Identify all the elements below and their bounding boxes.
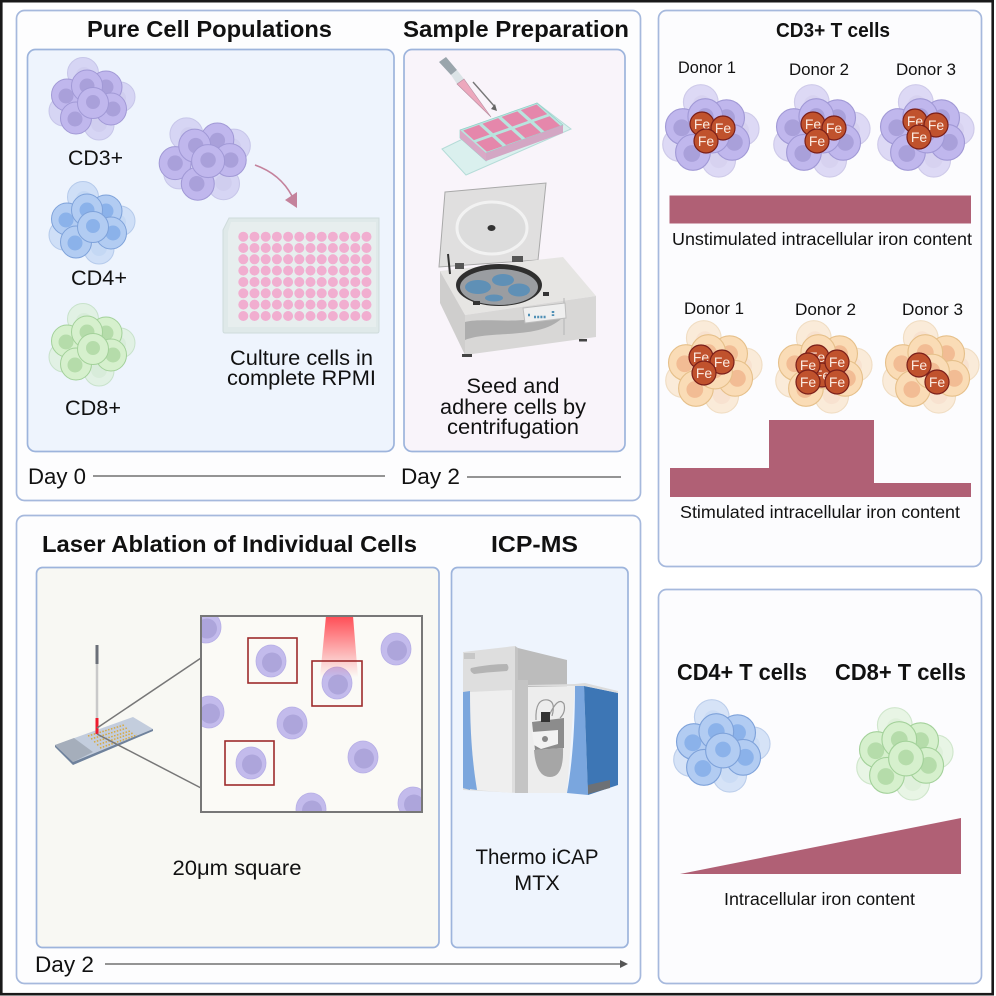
text: seed and adhere: adhere cells by xyxy=(440,395,586,419)
icon: 96-well plate xyxy=(223,218,379,333)
stimulated donor 2: Fe xyxy=(829,374,845,390)
stimulated donor 1: Fe xyxy=(696,365,712,381)
icon: chamber slide xyxy=(442,103,571,175)
icon: CD4+ cluster xyxy=(674,700,770,792)
stimulated donor 3: Donor 3 xyxy=(902,300,963,319)
panel: CD3+ T cells xyxy=(658,10,982,566)
text: Thermo iCAP MTX xyxy=(476,845,598,895)
unstimulated donor 3: Donor 3 xyxy=(896,60,956,79)
icon: CD3+ cell cluster xyxy=(49,58,135,140)
panel: pure cell populations xyxy=(28,50,394,452)
icon: pipette xyxy=(439,57,497,117)
stimulated donor 2: Fe xyxy=(829,354,845,370)
label: CD8+: CD8+ xyxy=(65,396,121,420)
stimulated donor 2: Donor 2 xyxy=(795,300,856,319)
unstimulated donor 1: Fe xyxy=(715,120,731,136)
heading: CD8+ T cells: CD8+ T cells xyxy=(835,659,966,685)
text: 20µm square: 20μm square xyxy=(172,856,302,880)
stimulated donor 2: Fe xyxy=(809,349,825,365)
icon: centrifuge xyxy=(439,183,596,357)
text: Thermo iCAP MTX: Thermo iCAP xyxy=(476,845,598,869)
connector lines xyxy=(97,658,201,788)
text: Thermo iCAP MTX: MTX xyxy=(514,871,560,895)
unstimulated donor 3 xyxy=(878,60,974,177)
unstimulated donor 2: Donor 2 xyxy=(789,60,849,79)
stimulated donor 3: Fe xyxy=(929,374,945,390)
zoomed field of cells xyxy=(200,615,423,813)
heading: Laser Ablation of Individual Cells: Laser Ablation of Individual Cells xyxy=(42,531,417,557)
stimulated donor 1: Fe xyxy=(693,349,709,365)
text: culture cells: Culture cells in xyxy=(230,346,373,370)
caption: unstimulated: Unstimulated intracellular iron content xyxy=(672,229,972,249)
text: seed and adhere xyxy=(440,374,586,439)
heading: Pure Cell Populations: Pure Cell Populations xyxy=(87,16,332,42)
unstimulated donor 2: Fe xyxy=(805,116,821,132)
unstimulated donor 3: Fe xyxy=(928,117,944,133)
unstimulated donor 1: Fe xyxy=(694,116,710,132)
unstimulated donor 2 xyxy=(774,60,870,177)
bar: unstimulated iron xyxy=(670,196,971,224)
heading: ICP-MS: ICP-MS xyxy=(491,531,578,557)
unstimulated donor 1: Fe xyxy=(698,133,714,149)
stimulated donor 2: Fe xyxy=(800,374,816,390)
unstimulated donor 3: Fe xyxy=(907,113,923,129)
stimulated donor 2 xyxy=(776,300,872,413)
unstimulated donor 2: Fe xyxy=(809,133,825,149)
panel: analysis bottom xyxy=(16,516,640,984)
icon: slide with laser xyxy=(55,645,153,765)
unstimulated donor 2: Fe xyxy=(826,120,842,136)
stimulated donor 3: Fe xyxy=(911,357,927,373)
caption: stimulated: Stimulated intracellular iron content xyxy=(680,502,960,522)
timeline: Day 2: Day 2 xyxy=(401,464,460,489)
panel: laser ablation xyxy=(36,568,439,948)
text: seed and adhere: Seed and xyxy=(466,374,560,398)
panel: ICP-MS xyxy=(452,568,628,948)
panel: sample workflow top xyxy=(16,10,640,500)
caption: iron content: Intracellular iron content xyxy=(724,889,915,909)
arrow: cells to plate xyxy=(255,165,297,208)
heading: CD3+ T cells: CD3+ T cells xyxy=(776,19,890,42)
icon: CD8+ cluster xyxy=(857,708,953,800)
unstimulated donor 3: Fe xyxy=(911,129,927,145)
heading: CD4+ T cells: CD4+ T cells xyxy=(677,659,807,685)
stimulated donor 2: Fe xyxy=(814,367,830,383)
label: CD3+: CD3+ xyxy=(68,146,123,170)
bar chart: stimulated iron xyxy=(670,420,971,497)
heading: Sample Preparation: Sample Preparation xyxy=(403,16,629,42)
stimulated donor 1: Fe xyxy=(714,354,730,370)
stimulated donor 3 xyxy=(883,300,979,413)
icon: CD8+ cell cluster xyxy=(49,304,135,386)
wedge chart: iron content xyxy=(680,818,961,874)
label: CD4+: CD4+ xyxy=(71,266,127,290)
icon: CD4+ cell cluster xyxy=(49,182,135,264)
text: seed and adhere: centrifugation xyxy=(447,415,579,439)
timeline: Day 2 arrow xyxy=(35,952,628,977)
icon: mixed cell cluster xyxy=(159,118,250,200)
panel: CD4 and CD8 comparison xyxy=(658,590,982,984)
timeline: Day 2 arrow: Day 2 xyxy=(35,952,94,977)
icon: mass spectrometer xyxy=(463,646,618,795)
text: complete RPMI: complete RPMI xyxy=(227,366,376,390)
unstimulated donor 1 xyxy=(663,58,759,177)
panel: sample preparation xyxy=(404,50,625,452)
unstimulated donor 1: Donor 1 xyxy=(678,58,736,77)
timeline: Day 0: Day 0 xyxy=(28,464,86,489)
stimulated donor 1 xyxy=(666,299,762,413)
stimulated donor 1: Donor 1 xyxy=(684,299,744,318)
stimulated donor 2: Fe xyxy=(800,357,816,373)
